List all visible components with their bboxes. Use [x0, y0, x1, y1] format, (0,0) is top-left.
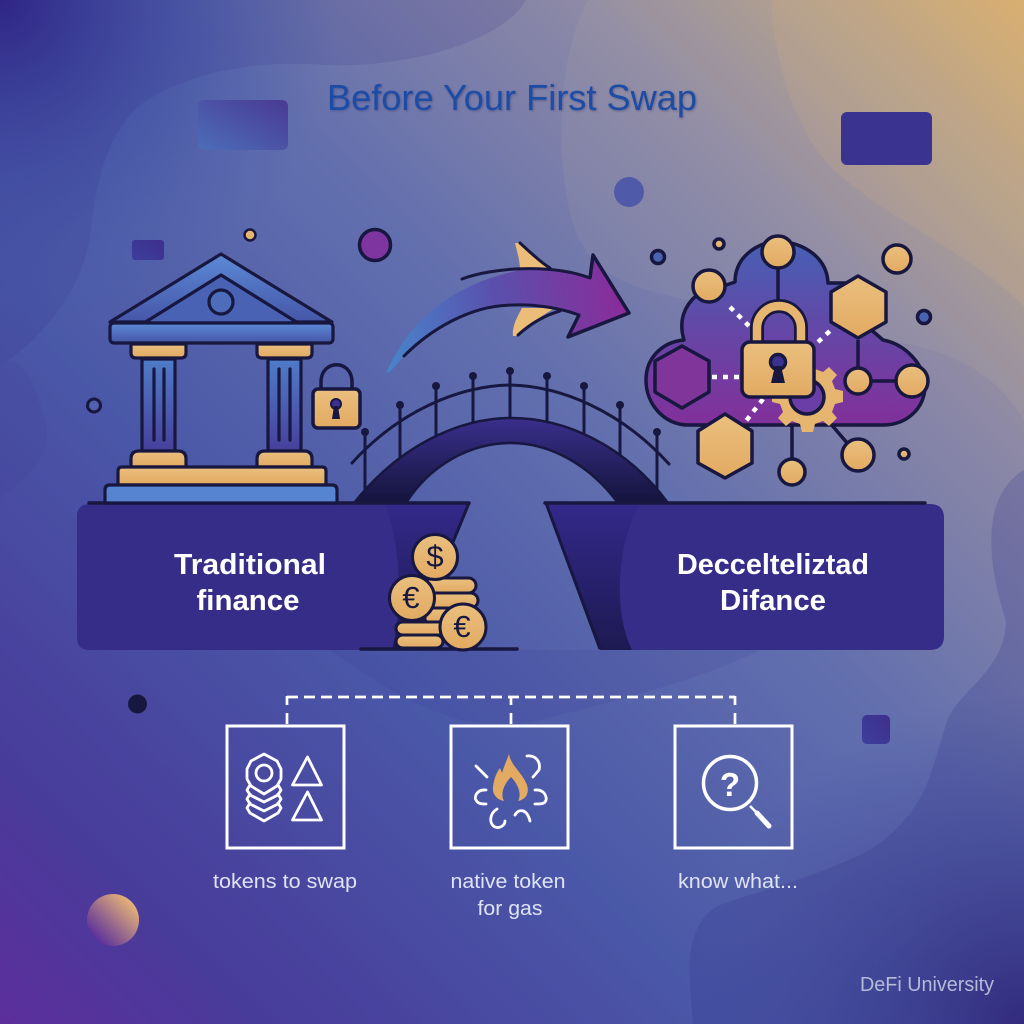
icon: coin stack: $ — [426, 539, 444, 574]
ground lines — [89, 501, 925, 505]
label: traditional finance — [174, 549, 326, 617]
icon: magnifier question — [704, 756, 769, 826]
panel: decentralized finance platform — [545, 503, 944, 650]
label: decentralized finance — [677, 549, 869, 617]
icon: padlock small — [313, 365, 360, 428]
caption: tokens to swap — [213, 871, 357, 893]
icon: flame and links — [475, 754, 546, 828]
card: know what — [675, 726, 798, 893]
arrow — [386, 243, 629, 373]
cloud — [646, 241, 925, 425]
caption: know what... — [678, 871, 798, 893]
label: traditional finance: Traditional — [174, 549, 326, 581]
label: traditional finance: finance — [196, 585, 300, 617]
dashed links — [712, 307, 832, 421]
gear — [772, 361, 843, 432]
panel: traditional finance platform — [77, 503, 469, 650]
icon: coin stack: € — [402, 580, 420, 615]
caption: for gas — [478, 898, 542, 920]
icon: bank — [105, 254, 337, 503]
card: native token for gas — [450, 726, 568, 920]
watermark: DeFi University — [860, 974, 994, 996]
title: Before Your First Swap — [327, 77, 697, 118]
icon: tokens — [247, 754, 322, 821]
nodes — [693, 236, 928, 485]
icon: magnifier question: ? — [720, 766, 740, 803]
label: decentralized finance: Decceltelizt​ad — [677, 549, 869, 581]
decorative shapes — [87, 100, 932, 946]
label: decentralized finance: Difance — [720, 585, 826, 617]
icon: coin stack: € — [453, 609, 471, 644]
card: tokens to swap — [213, 726, 357, 893]
icon: decentralized cloud network — [646, 236, 930, 485]
caption — [450, 871, 566, 920]
dashed connector — [287, 696, 735, 724]
icon: coin stack — [361, 534, 517, 650]
hexagons — [655, 346, 709, 408]
padlock — [757, 306, 801, 342]
bridge — [352, 367, 669, 503]
caption: native token — [450, 871, 566, 893]
